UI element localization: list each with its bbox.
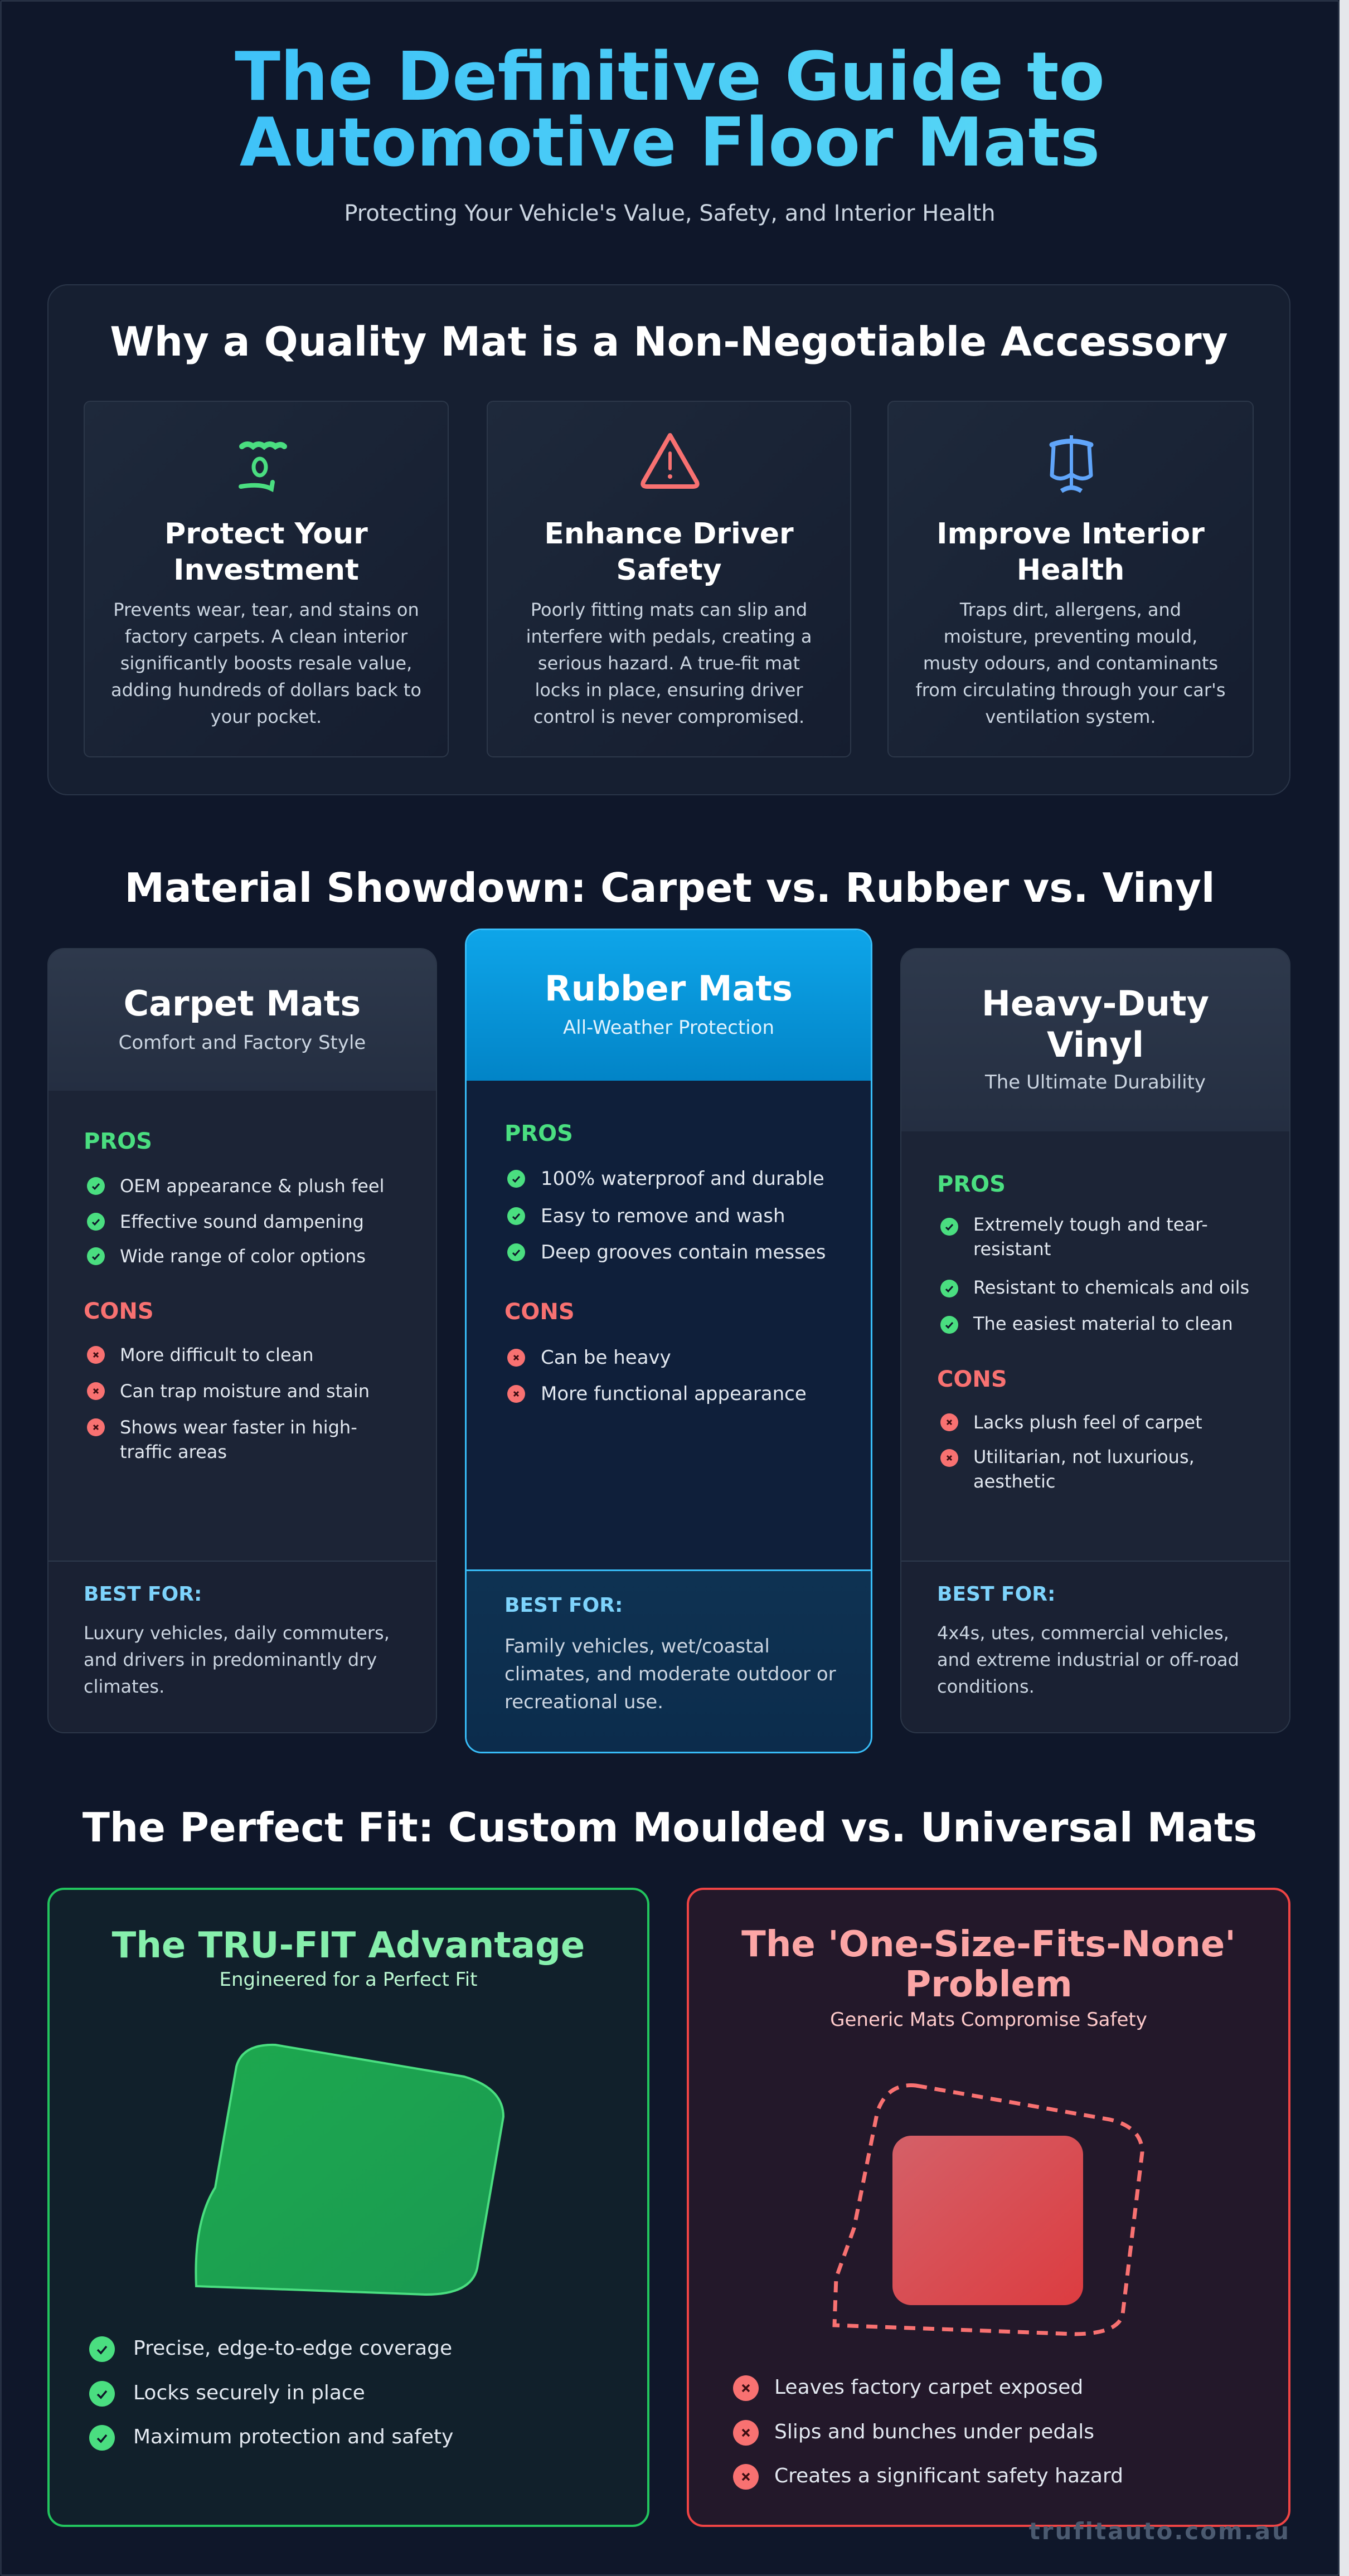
list: tru-fit benefits: Maximum protection and safety (133, 2426, 453, 2448)
pros list: Wide range of color options (120, 1246, 366, 1267)
heading: problem: The 'One-Size-Fits-None' (741, 1924, 1236, 1965)
cons list (504, 1299, 807, 1405)
card heading: Safety (616, 553, 722, 587)
illustration: custom mat (195, 2043, 504, 2296)
pros list: 100% waterproof and durable (541, 1168, 824, 1190)
panel: tru-fit advantage: Engineered for a Perfect Fit (220, 1969, 477, 1991)
list: problems: Leaves factory carpet exposed (774, 2376, 1083, 2399)
card heading (544, 517, 794, 587)
best for: carpet (48, 1561, 436, 1733)
best for: carpet: climates. (84, 1676, 164, 1697)
cons list: Utilitarian, not luxurious, (973, 1446, 1195, 1467)
best for: rubber: Family vehicles, wet/coastal (504, 1635, 770, 1658)
cons list: aesthetic (973, 1471, 1056, 1492)
panel: one-size-fits-none: Generic Mats Compromise Safety (830, 2009, 1147, 2031)
card text: interfere with pedals, creating a (526, 626, 812, 647)
header: rubber: All-Weather Protection (563, 1017, 774, 1039)
header: vinyl: Heavy-Duty (982, 983, 1209, 1024)
panel: why quality mat (47, 284, 1290, 795)
card text: your pocket. (211, 706, 322, 727)
panel: one-size-fits-none (687, 1888, 1290, 2527)
pros list (84, 1129, 384, 1267)
title (0, 45, 1340, 176)
card text: significantly boosts resale value, (120, 653, 412, 674)
card heading: Enhance Driver (544, 517, 794, 551)
pros list: Extremely tough and tear- (973, 1214, 1208, 1235)
best for: carpet: and drivers in predominantly dry (84, 1649, 377, 1670)
illustration: universal mat (832, 2083, 1144, 2336)
heading: problem (741, 1924, 1236, 2005)
card text: musty odours, and contaminants (923, 653, 1218, 674)
cons list (937, 1367, 1202, 1492)
card: interior health (887, 401, 1254, 757)
card text: from circulating through your car's (915, 679, 1225, 701)
best for: vinyl: and extreme industrial or off-road (937, 1649, 1239, 1670)
pros list: resistant (973, 1238, 1051, 1260)
best for: vinyl (901, 1561, 1289, 1733)
list: problems: Slips and bunches under pedals (774, 2421, 1094, 2443)
card text: Prevents wear, tear, and stains on (113, 599, 419, 620)
header: rubber: Rubber Mats (545, 968, 793, 1009)
best for: carpet: Luxury vehicles, daily commuters, (84, 1622, 390, 1644)
header: carpet: Comfort and Factory Style (119, 1032, 366, 1054)
cons list: More difficult to clean (120, 1344, 313, 1365)
title: Automotive Floor Mats (240, 104, 1100, 182)
best for: rubber (467, 1569, 871, 1753)
list: problems: Creates a significant safety hazard (774, 2465, 1123, 2487)
card heading (936, 517, 1205, 587)
subtitle: Protecting Your Vehicle's Value, Safety, and Interior Health (344, 201, 996, 226)
list: tru-fit benefits: Locks securely in place (133, 2381, 365, 2404)
header: vinyl: The Ultimate Durability (985, 1071, 1206, 1093)
cons list: CONS (84, 1299, 154, 1324)
heading: material showdown: Material Showdown: Carpet vs. Rubber vs. Vinyl (124, 864, 1215, 911)
header: carpet: Carpet Mats (124, 983, 361, 1024)
card heading: Improve Interior (936, 517, 1205, 551)
cons list: CONS (937, 1367, 1007, 1392)
panel: vinyl (900, 948, 1290, 1733)
card text: control is never compromised. (533, 706, 804, 727)
card text: ventilation system. (985, 706, 1156, 727)
pros list: PROS (937, 1172, 1006, 1197)
pros list (937, 1172, 1249, 1334)
cons list: Shows wear faster in high- (120, 1417, 357, 1438)
cons list: Can trap moisture and stain (120, 1381, 370, 1402)
pros list: OEM appearance & plush feel (120, 1175, 384, 1197)
card heading: Investment (173, 553, 359, 587)
card text: serious hazard. A true-fit mat (538, 653, 800, 674)
card: protect investment (84, 401, 449, 757)
cons list: Lacks plush feel of carpet (973, 1412, 1202, 1433)
list: problems (733, 2375, 1123, 2490)
heading: perfect fit: The Perfect Fit: Custom Moulded vs. Universal Mats (83, 1804, 1257, 1851)
cons list: Can be heavy (541, 1347, 671, 1369)
cons list: More functional appearance (541, 1383, 807, 1405)
card text: factory carpets. A clean interior (125, 626, 407, 647)
list: tru-fit benefits: Precise, edge-to-edge coverage (133, 2337, 452, 2360)
card text (526, 599, 812, 727)
card text: moisture, preventing mould, (944, 626, 1197, 647)
icon: money (239, 441, 287, 492)
list: tru-fit benefits (89, 2336, 453, 2451)
panel: carpet mats (47, 948, 437, 1733)
pros list (504, 1121, 826, 1263)
heading: why: Why a Quality Mat is a Non-Negotiable Accessory (110, 318, 1228, 365)
cons list (84, 1299, 370, 1462)
footer: website: trufitauto.com.au (1029, 2517, 1290, 2545)
best for: rubber: recreational use. (504, 1691, 663, 1713)
best for: carpet: BEST FOR: (84, 1583, 202, 1606)
best for: rubber: climates, and moderate outdoor or (504, 1663, 836, 1685)
header: rubber (467, 930, 871, 1081)
card: driver safety (487, 401, 851, 757)
card heading: Health (1017, 553, 1124, 587)
pros list: PROS (504, 1121, 573, 1146)
card text (111, 599, 421, 727)
best for: rubber: BEST FOR: (504, 1594, 623, 1617)
header: carpet (48, 949, 436, 1091)
header: vinyl: Vinyl (1047, 1024, 1144, 1065)
pros list: Effective sound dampening (120, 1211, 364, 1232)
pros list: The easiest material to clean (973, 1313, 1233, 1334)
card heading (164, 517, 368, 587)
pros list: Resistant to chemicals and oils (973, 1277, 1249, 1298)
best for: vinyl: BEST FOR: (937, 1583, 1055, 1606)
panel: rubber mats (465, 929, 872, 1753)
heading: tru-fit: The TRU-FIT Advantage (112, 1925, 585, 1966)
card text: Traps dirt, allergens, and (960, 599, 1181, 620)
cons list: CONS (504, 1299, 575, 1325)
pros list: Deep grooves contain messes (541, 1241, 826, 1263)
card text (915, 599, 1225, 727)
card text: adding hundreds of dollars back to (111, 679, 421, 701)
cons list: traffic areas (120, 1441, 227, 1462)
title: The Definitive Guide to (235, 38, 1105, 116)
icon: scale (1049, 435, 1094, 493)
pros list: PROS (84, 1129, 152, 1154)
card text: locks in place, ensuring driver (535, 679, 803, 701)
header: vinyl (901, 949, 1289, 1131)
icon: warning (640, 433, 700, 489)
heading: problem: Problem (905, 1964, 1073, 2005)
pros list: Easy to remove and wash (541, 1205, 785, 1227)
card heading: Protect Your (164, 517, 368, 551)
best for: vinyl: 4x4s, utes, commercial vehicles, (937, 1622, 1229, 1644)
card text: Poorly fitting mats can slip and (531, 599, 807, 620)
best for: vinyl: conditions. (937, 1676, 1035, 1697)
panel: tru-fit advantage (47, 1888, 649, 2527)
